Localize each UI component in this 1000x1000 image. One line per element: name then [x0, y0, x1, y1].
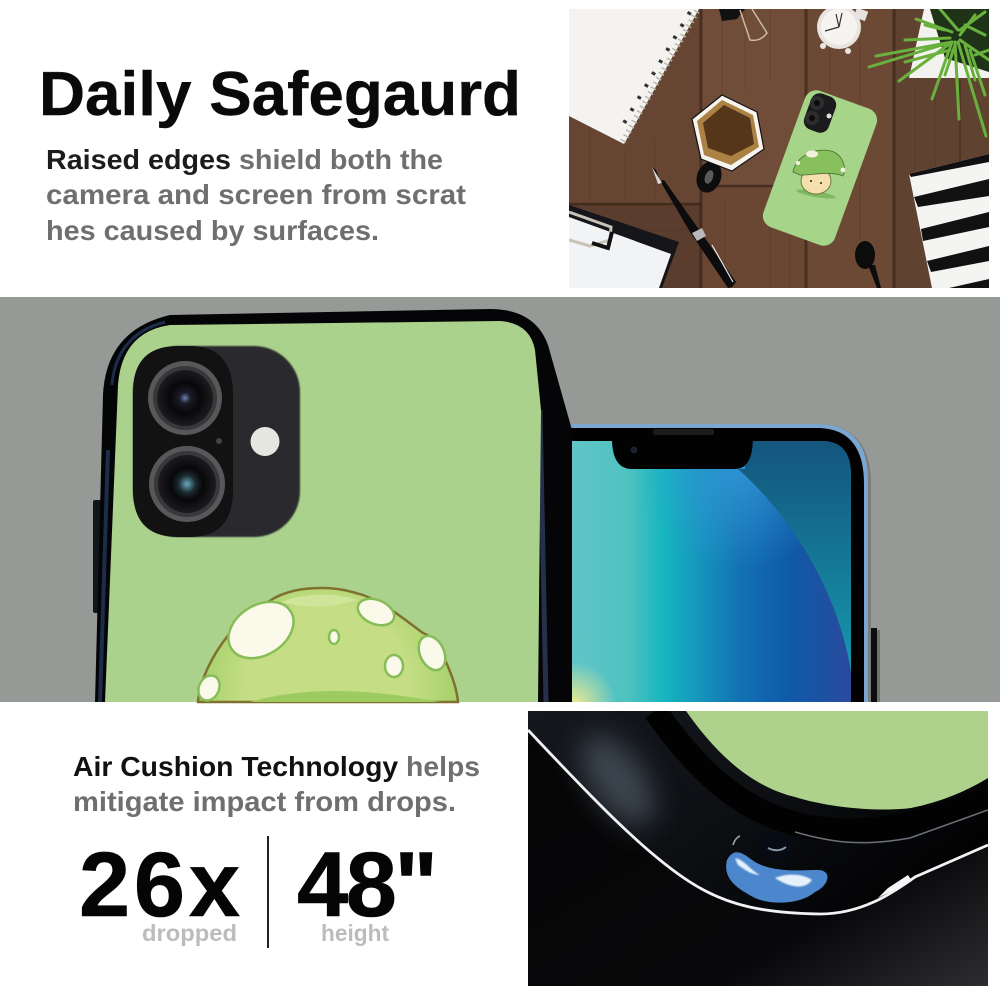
stat: 26x dropped: dropped [142, 920, 237, 946]
white edge highlight [528, 730, 988, 914]
small phone case [759, 87, 881, 249]
title: Daily Safegaurd [39, 60, 521, 129]
text block: raised edges description: hes caused by surfaces. [46, 215, 379, 246]
stat: 26x dropped: 26x [79, 834, 240, 936]
stat: 48 inches height: height [321, 920, 389, 946]
text block: raised edges description: Raised edges shield both the [46, 144, 443, 175]
binder clip [719, 9, 767, 40]
green case back [686, 711, 988, 810]
coffee cup [692, 95, 764, 196]
lens top [148, 361, 222, 435]
clipboard [569, 205, 679, 288]
striped notebook [909, 154, 989, 288]
lens bottom [149, 446, 225, 522]
phone screen wallpaper [572, 441, 852, 702]
alarm clock [817, 5, 868, 54]
stat: 48 inches height: 48" [297, 834, 438, 936]
text block: raised edges description: camera and screen from scrat [46, 179, 466, 210]
panel: grey band with phone close-up [0, 297, 1000, 704]
photo: air cushion corner close-up [528, 711, 988, 986]
notebook [569, 9, 699, 144]
text block: raised edges description [46, 144, 466, 246]
flash [250, 427, 280, 456]
phone back case [93, 309, 572, 704]
air cushion bubble [726, 833, 827, 903]
case bumper body [528, 711, 988, 914]
text block: air cushion description: mitigate impact from drops. [73, 786, 456, 817]
small mushroom [793, 150, 846, 194]
mushroom top [194, 588, 458, 704]
text block: air cushion description: Air Cushion Technology helps [73, 751, 480, 782]
text block: air cushion description [73, 751, 480, 817]
black spoon [855, 241, 881, 288]
pen [652, 167, 736, 288]
phone front with screen [560, 424, 880, 702]
potted plant [869, 9, 989, 136]
camera module [133, 346, 300, 537]
photo: phone case on wooden desk [569, 5, 989, 288]
